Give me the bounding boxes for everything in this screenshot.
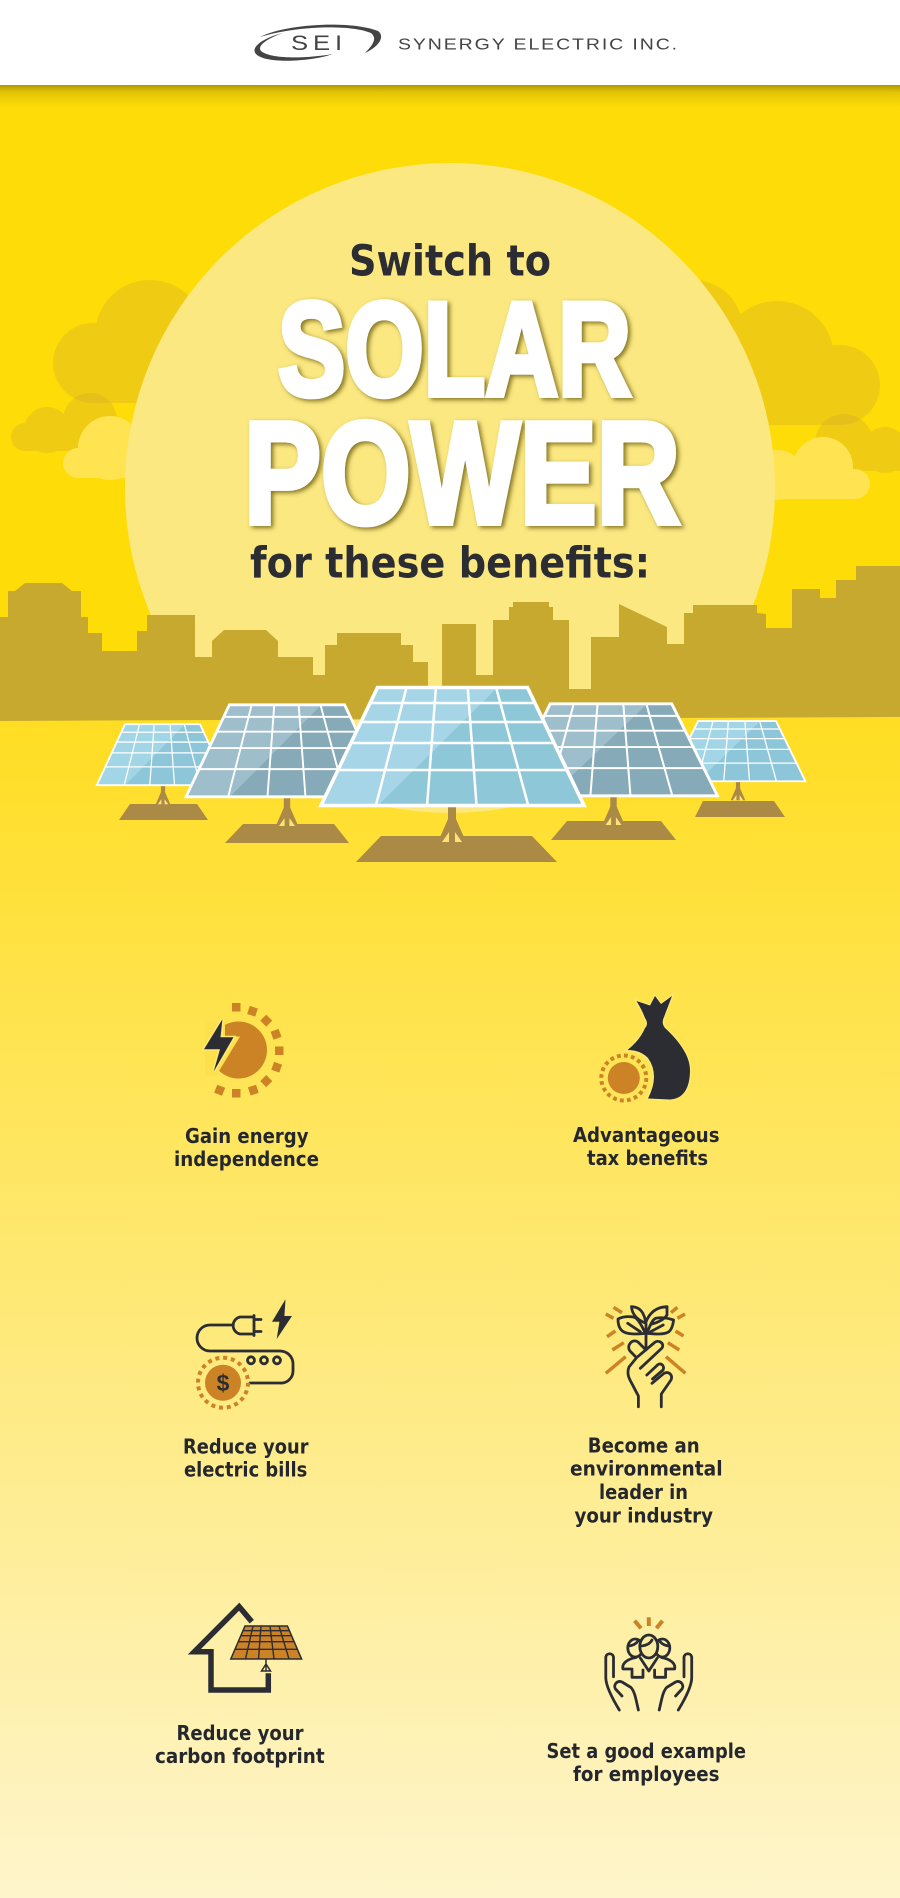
label: carbon footprint <box>155 1744 325 1768</box>
icon: house with solar panel <box>194 1607 302 1690</box>
label: tax benefits <box>587 1146 708 1170</box>
label: Set a good example <box>546 1739 746 1763</box>
solar panels <box>97 688 805 862</box>
skyline <box>0 566 900 721</box>
label <box>174 1124 319 1171</box>
solar panel: inner right <box>504 704 718 840</box>
label: environmental <box>570 1457 723 1481</box>
benefit: carbon footprint <box>155 1607 325 1768</box>
title line: POWER: POWER <box>244 392 680 554</box>
logo mark: SEI <box>291 32 347 55</box>
solar panel: far right <box>669 721 805 817</box>
logo <box>254 25 679 61</box>
cloud: small left <box>11 393 130 453</box>
label: leader in <box>599 1480 688 1504</box>
sun <box>125 163 775 813</box>
label <box>573 1123 720 1170</box>
cloud: light left <box>63 416 170 480</box>
label: Advantageous <box>573 1123 720 1147</box>
label <box>570 1434 723 1528</box>
solar panel: centre <box>321 688 584 862</box>
logo wordmark: SYNERGY ELECTRIC INC. <box>398 36 679 53</box>
clouds behind the sun <box>11 280 900 500</box>
cloud: small right <box>815 414 900 473</box>
label: Reduce your <box>183 1434 309 1458</box>
header bar <box>0 0 900 107</box>
cloud: light right <box>750 437 870 500</box>
label <box>546 1739 746 1786</box>
title line: SOLAR: SOLAR <box>278 276 631 424</box>
title <box>244 236 680 588</box>
cloud: large right <box>643 280 880 425</box>
title line: for these benefits: for these benefits: <box>250 538 650 588</box>
icon: plug and dollar coin <box>197 1299 293 1408</box>
icon: hands holding people <box>606 1617 692 1710</box>
benefit: electric bills <box>183 1299 309 1482</box>
title line: Switch to: Switch to <box>349 236 551 286</box>
benefit: energy independence <box>174 1003 319 1171</box>
icon: hand holding plant <box>606 1307 685 1407</box>
label: Reduce your <box>176 1721 304 1745</box>
header shadow <box>0 85 900 107</box>
solar panel: far left <box>97 724 228 820</box>
label: your industry <box>574 1504 713 1528</box>
label: Become an <box>588 1434 700 1458</box>
benefit: tax benefits <box>573 996 720 1170</box>
icon: plug and dollar coin: $ <box>217 1370 230 1396</box>
icon: sun with lightning bolt <box>204 1003 284 1098</box>
solar panel: inner left <box>186 705 388 843</box>
label <box>155 1721 325 1768</box>
benefit: good example <box>546 1617 746 1786</box>
benefit: environmental leader <box>570 1307 723 1528</box>
label: Gain energy <box>185 1124 308 1148</box>
label <box>183 1434 309 1482</box>
label: electric bills <box>184 1458 307 1482</box>
label: for employees <box>573 1762 720 1786</box>
logo mark <box>254 25 381 61</box>
icon: money bag with coin <box>601 996 690 1100</box>
cloud: large left <box>53 280 223 403</box>
label: independence <box>174 1147 319 1171</box>
